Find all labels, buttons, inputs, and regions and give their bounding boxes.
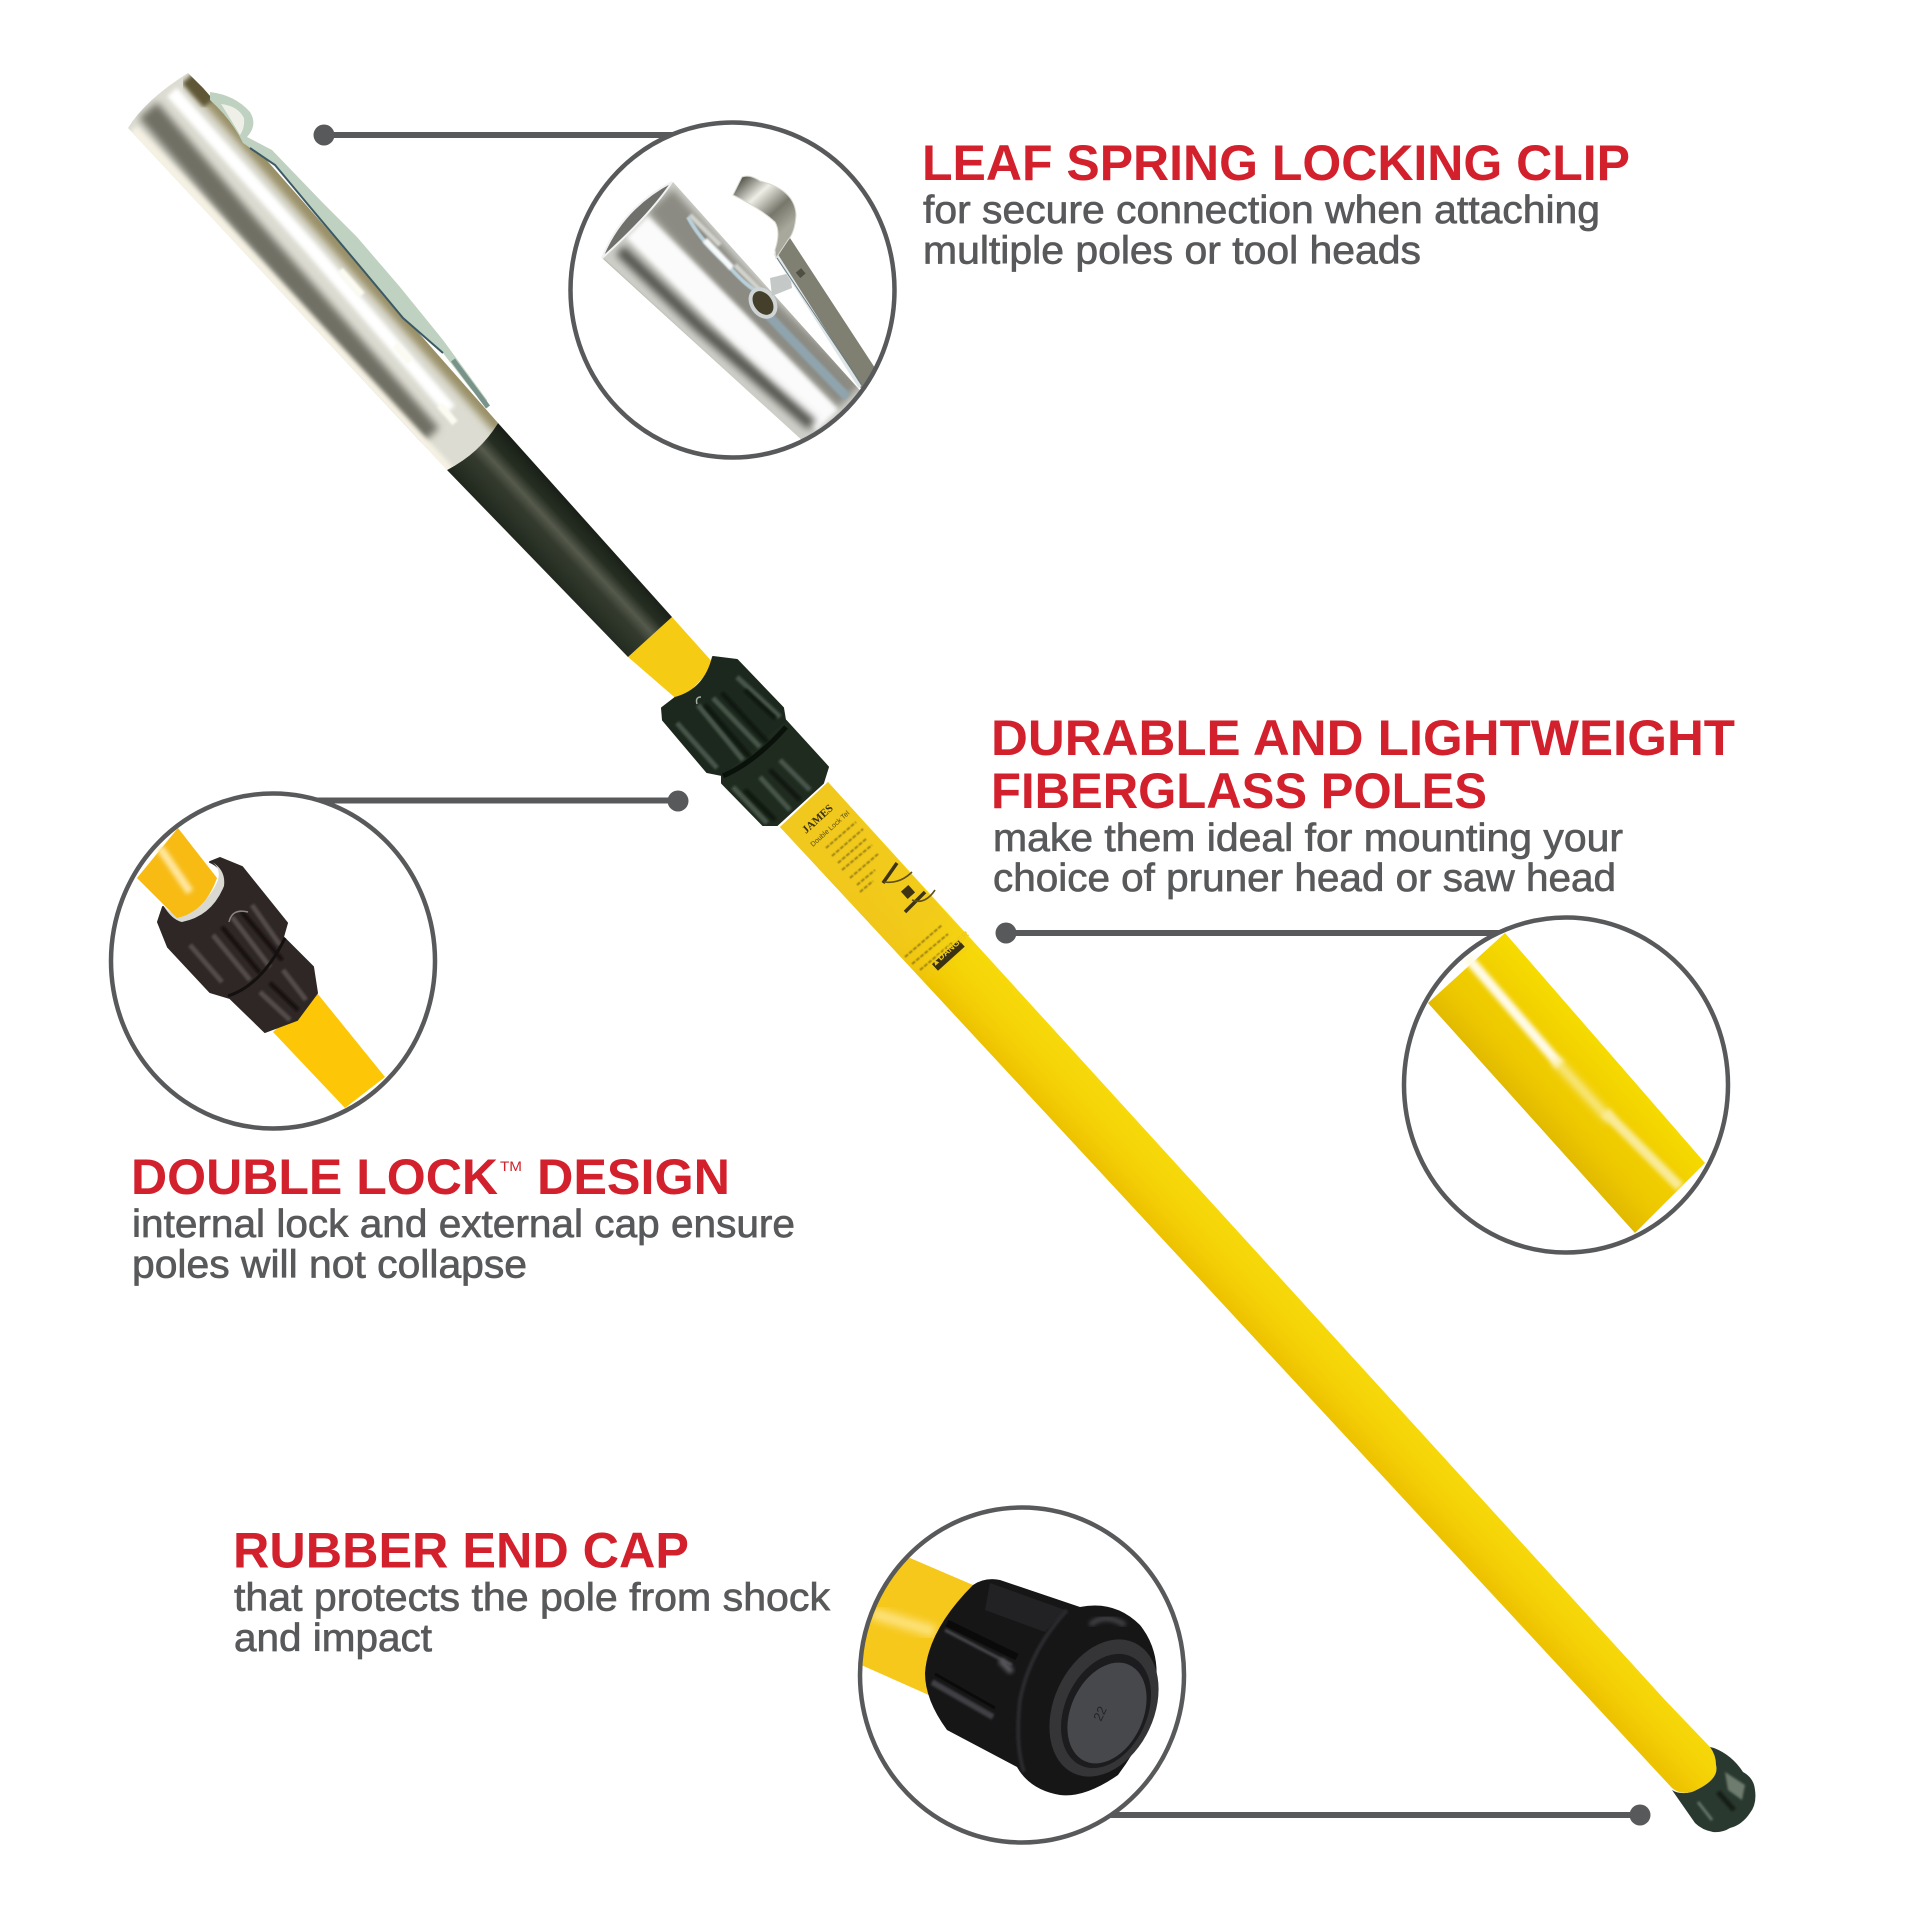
description [132,1203,795,1286]
description [234,1576,831,1660]
leader line and dot [314,124,673,146]
heading: FIBERGLASS POLES [991,763,1487,819]
pole: product label: Double Lock Tel [810,810,852,848]
pole: product label [780,782,975,983]
pole: leaf spring locking clip [210,92,488,408]
zoom circle: end cap detail [850,1508,1184,1842]
heading [131,1149,730,1205]
description [923,189,1600,272]
leader line and dot [1110,1804,1650,1826]
heading: DESIGN [537,1149,730,1205]
callout: rubber end cap [233,1508,1650,1842]
pole: black sleeve [447,423,672,657]
description: choice of pruner head or saw head [993,857,1616,900]
description: that protects the pole from shock [234,1576,831,1620]
pole: short yellow section [628,617,715,702]
description: for secure connection when attaching [923,189,1600,232]
zoom circle: end cap detail: 22 [1090,1704,1110,1723]
pole: product label: JAMES [800,802,836,836]
pole: double lock collar [662,657,828,825]
zoom circle: clip detail [568,120,897,460]
description: internal lock and external cap ensure [132,1203,795,1246]
callout: durable and lightweight fiberglass poles [991,710,1735,1252]
pole: yellow fiberglass shaft [780,782,1716,1793]
heading: LEAF SPRING LOCKING CLIP [922,135,1630,191]
heading: RUBBER END CAP [233,1522,689,1578]
heading: TM [500,1158,522,1174]
description: and impact [234,1617,432,1660]
heading: DURABLE AND LIGHTWEIGHT [991,710,1735,766]
leader line and dot [310,790,688,812]
pole: product label: ▲DANGER [929,929,971,968]
pole: silver metal ferrule [128,73,498,470]
zoom circle: yellow pole detail [1404,918,1728,1252]
heading [991,710,1735,819]
callout: leaf spring locking clip [314,122,1630,490]
description: multiple poles or tool heads [923,230,1421,272]
leader line and dot [996,922,1502,944]
description [993,817,1623,900]
pole: rubber end cap [1672,1747,1755,1832]
zoom circle: collar detail [111,794,435,1128]
callout: double lock design [111,790,795,1286]
description: make them ideal for mounting your [993,817,1623,860]
description: poles will not collapse [132,1244,527,1286]
heading: DOUBLE LOCK [131,1149,498,1205]
